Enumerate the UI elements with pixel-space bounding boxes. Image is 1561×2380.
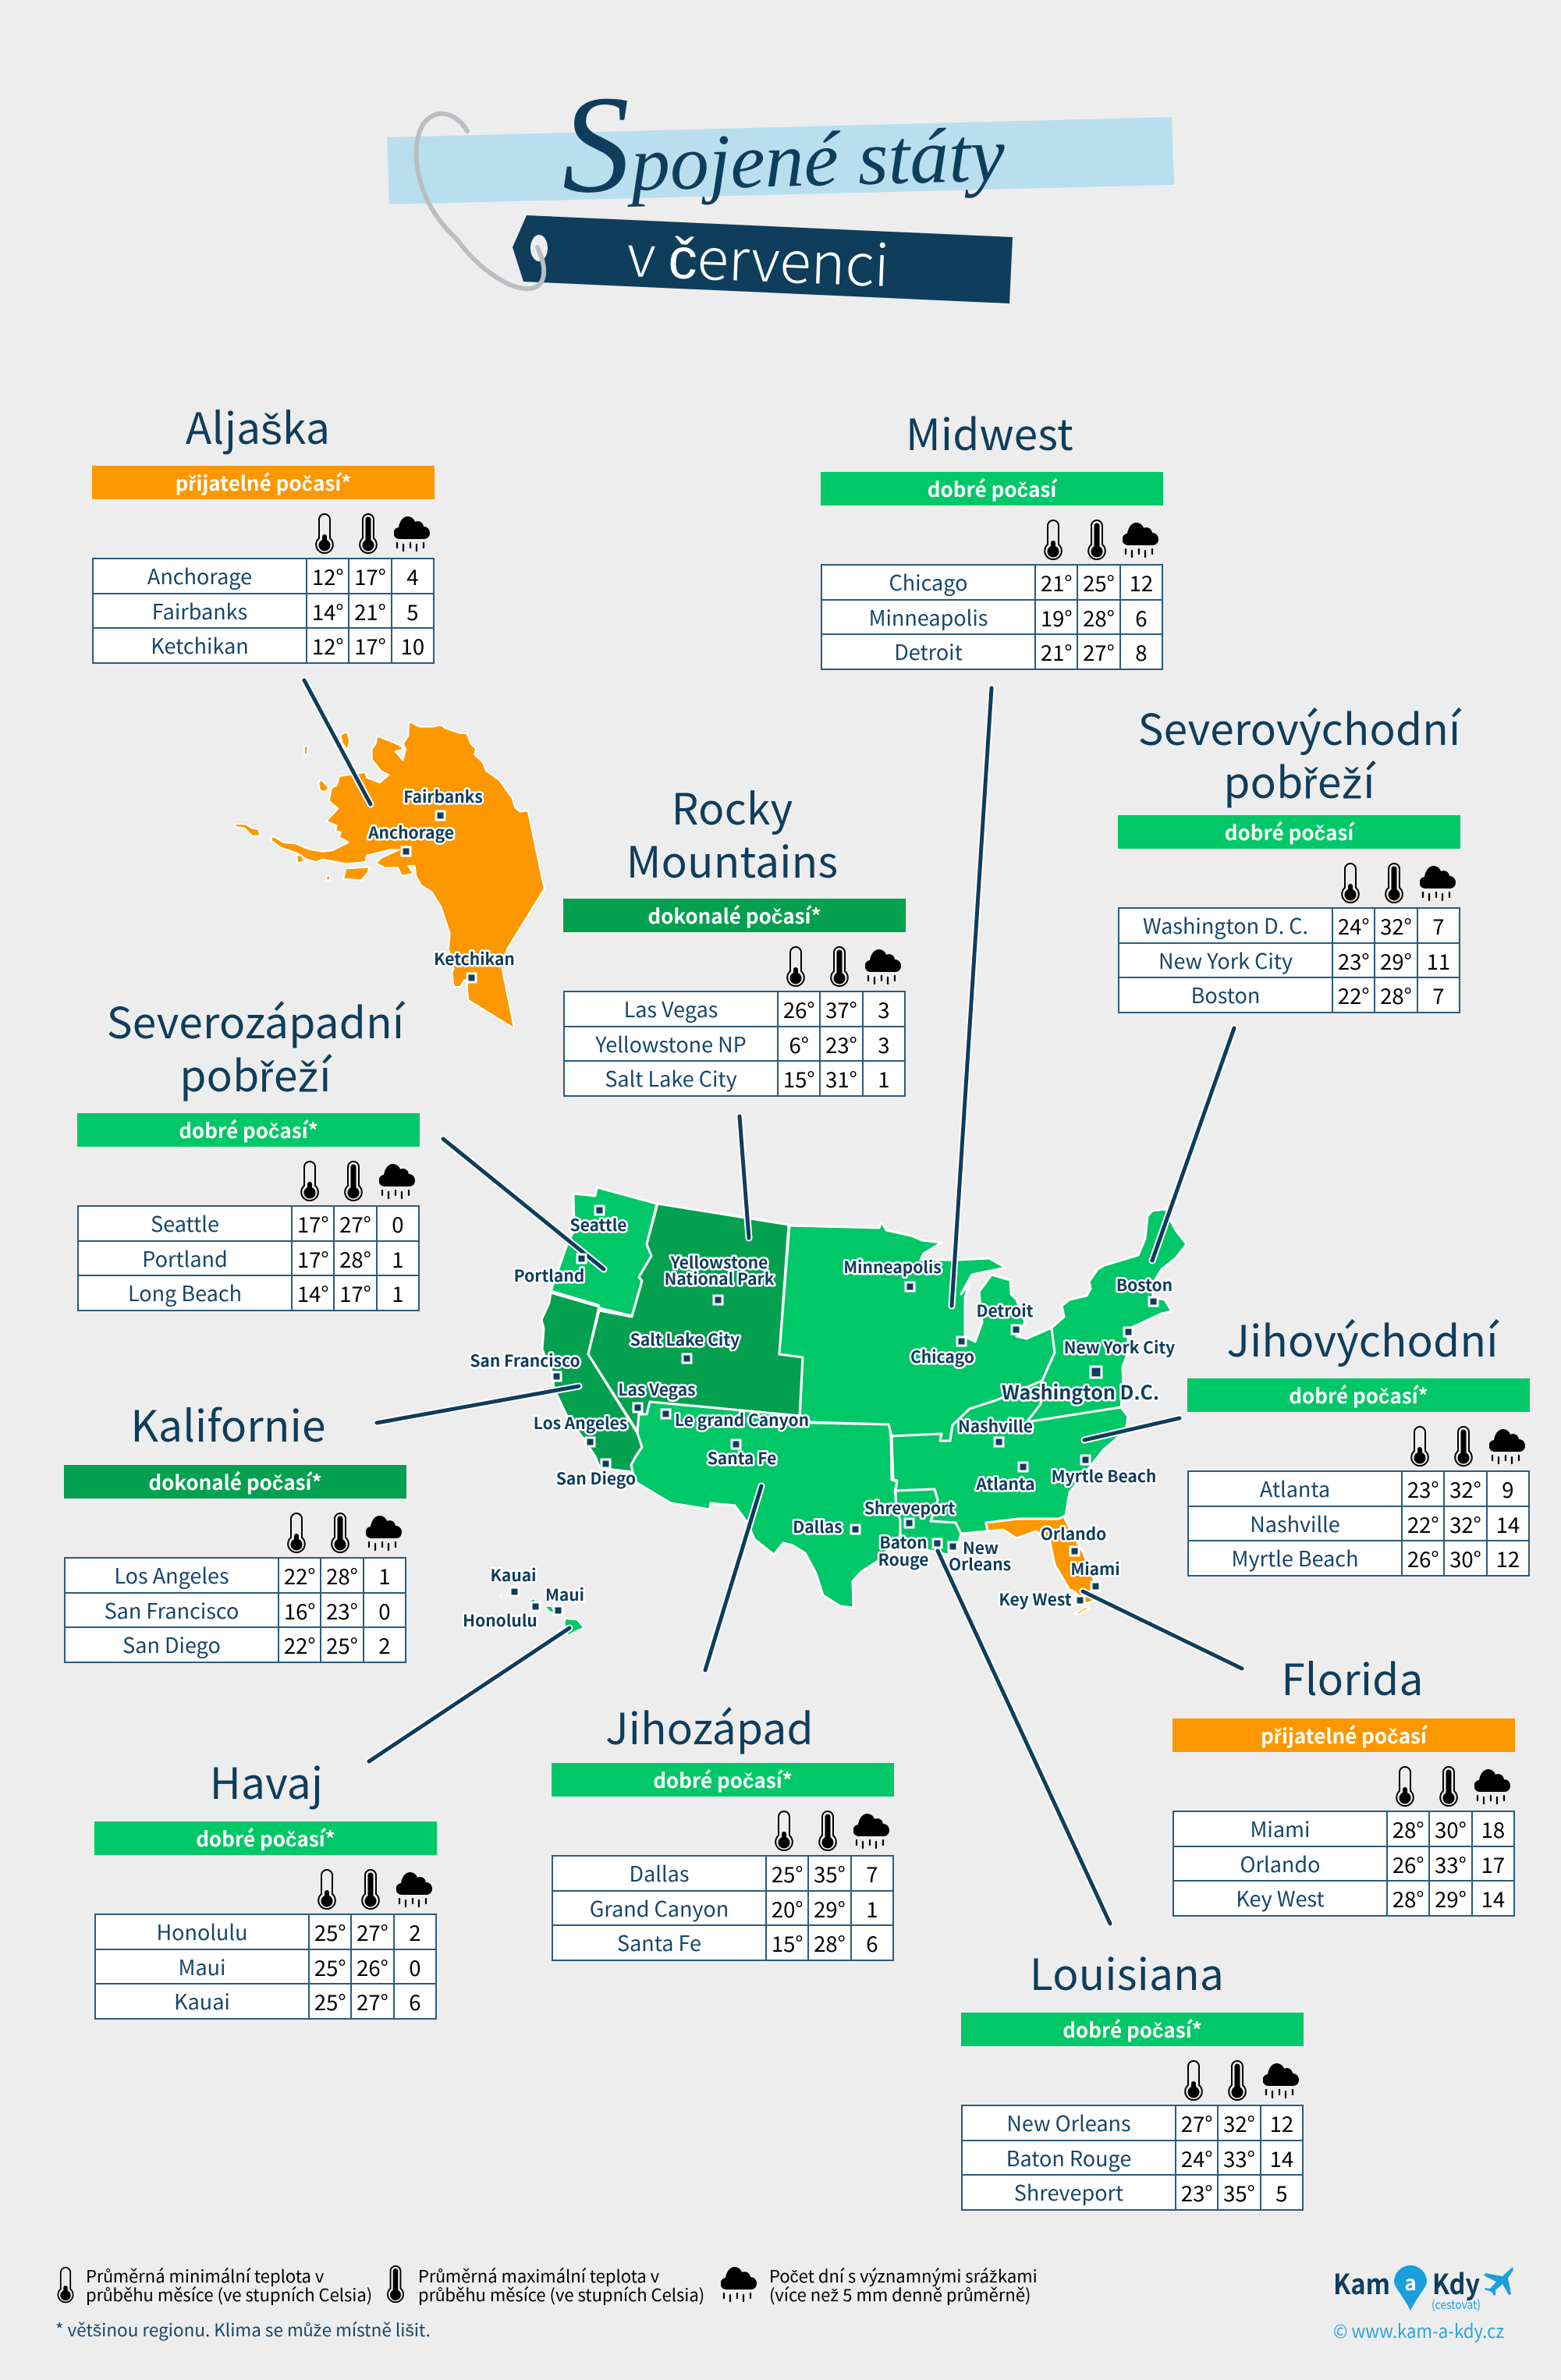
panel: Havaj — [94, 1749, 437, 2020]
icons — [1341, 863, 1456, 903]
map: Northeast region — [1027, 1209, 1187, 1422]
logo: Kam a Kdy: Kam — [1333, 2262, 1390, 2303]
icons — [1410, 1426, 1525, 1467]
table — [552, 1855, 894, 1961]
city: New Orleans: New — [963, 1536, 999, 1559]
table: Yellowstone NP — [595, 1028, 747, 1059]
city: Orlando: Orlando — [1041, 1522, 1106, 1545]
rating — [64, 1465, 406, 1499]
table: 5 — [406, 595, 418, 626]
heading: Rocky — [672, 775, 793, 837]
table: 5 — [1275, 2176, 1287, 2208]
panel: Aljaška — [92, 394, 435, 664]
table: Chicago — [889, 566, 967, 597]
icons — [315, 513, 430, 554]
table: 25° — [772, 1857, 804, 1889]
table: 7 — [1432, 910, 1444, 941]
rating — [552, 1763, 894, 1797]
icons — [94, 1869, 437, 1913]
rating — [1118, 815, 1460, 849]
pointer: Midwest — [952, 688, 992, 1306]
city: Miami: Miami — [1070, 1557, 1120, 1580]
icons — [1396, 1766, 1510, 1807]
city: Santa Fe: Santa Fe — [708, 1446, 776, 1470]
rating — [961, 2013, 1304, 2046]
icons — [300, 1161, 415, 1201]
table: 26° — [783, 993, 815, 1024]
table: 22° — [284, 1629, 316, 1660]
city: Orlando — [1041, 1522, 1106, 1555]
table: 1 — [878, 1062, 889, 1094]
pointer: California — [377, 1386, 579, 1423]
pointer: Southwest — [705, 1486, 761, 1670]
panel: Midwest — [821, 400, 1163, 670]
table: 27° — [339, 1208, 371, 1239]
table: Miami — [1250, 1813, 1310, 1843]
city: Detroit — [976, 1299, 1034, 1334]
legend text: maximum temperature: průběhu měsíce (ve stupních Celsia) — [418, 2282, 704, 2307]
table: 1 — [866, 1892, 878, 1924]
table: 35° — [814, 1857, 846, 1889]
rating: dobré počasí — [1225, 818, 1353, 846]
table: 21° — [1041, 636, 1073, 667]
table: Nashville — [1250, 1508, 1340, 1538]
table: Atlanta — [1260, 1473, 1330, 1503]
table: 26° — [1407, 1542, 1439, 1573]
table: New Orleans — [1006, 2107, 1131, 2137]
city: Los Angeles — [534, 1411, 627, 1446]
table: 10 — [401, 630, 424, 661]
table: 12 — [1130, 566, 1153, 598]
map: Northwest coast region — [551, 1187, 657, 1316]
heading — [107, 988, 406, 1104]
icons — [287, 1513, 402, 1553]
table: Shreveport — [1014, 2176, 1123, 2207]
heading: Jihovýchodní — [1226, 1307, 1499, 1369]
table: 21° — [1041, 566, 1073, 598]
table: Fairbanks — [152, 595, 247, 626]
legend icon: rain days — [721, 2267, 757, 2303]
city: Honolulu: Honolulu — [463, 1609, 537, 1632]
map: Alaska — [236, 722, 545, 1028]
table: 29° — [1435, 1882, 1467, 1914]
table: 12° — [312, 630, 344, 661]
rating: dokonalé počasí* — [148, 1467, 322, 1496]
table: 3 — [878, 1028, 889, 1059]
city: New Orleans: Orleans — [949, 1552, 1011, 1576]
table: Maui — [179, 1951, 225, 1981]
table: 12 — [1270, 2107, 1293, 2138]
city: Fairbanks: Fairbanks — [403, 785, 483, 808]
logo: Kam a Kdy: © www.kam-a-kdy.cz — [1333, 2316, 1504, 2343]
city: Ketchikan — [434, 947, 515, 982]
table: Ketchikan — [151, 630, 249, 660]
table: Grand Canyon — [590, 1892, 729, 1923]
legend text: rain days — [769, 2266, 1038, 2304]
table: 27° — [1181, 2107, 1213, 2138]
map: Hawaii islands — [498, 1593, 584, 1636]
table: 24° — [1181, 2142, 1213, 2173]
table: 35° — [1223, 2176, 1255, 2208]
table: 32° — [1449, 1508, 1481, 1539]
table: 18 — [1481, 1813, 1505, 1844]
table: 24° — [1338, 910, 1370, 941]
city: Miami — [1070, 1557, 1120, 1591]
city: Yellowstone National Park: National Park — [665, 1267, 775, 1290]
heading: Jihozápad — [605, 1694, 814, 1757]
table — [821, 564, 1163, 669]
table: 4 — [406, 560, 418, 591]
table: 1 — [392, 1277, 403, 1308]
table: 17° — [297, 1208, 329, 1239]
table: 23° — [825, 1028, 857, 1059]
table: 28° — [1380, 979, 1412, 1010]
logo: Kam a Kdy — [1326, 2262, 1521, 2348]
panel: Kalifornie — [64, 1392, 406, 1663]
table: 17 — [1481, 1848, 1505, 1879]
table: 31° — [825, 1062, 857, 1094]
table: Portland — [142, 1243, 228, 1273]
city: Key West: Key West — [999, 1587, 1072, 1611]
pointer: Rocky Mountains — [740, 1116, 749, 1238]
table: Myrtle Beach — [1232, 1542, 1358, 1573]
table: 16° — [284, 1594, 316, 1626]
legend text: minimum temperature: průběhu měsíce (ve stupních Celsia) — [86, 2282, 372, 2307]
heading: pobřeží — [1223, 748, 1375, 810]
table: 17° — [354, 630, 386, 661]
table: 32° — [1223, 2107, 1255, 2138]
table: 22° — [284, 1559, 316, 1591]
heading: Midwest — [906, 400, 1073, 463]
table: 27° — [357, 1916, 388, 1947]
table — [77, 1205, 420, 1311]
city: Los Angeles: Los Angeles — [534, 1411, 627, 1435]
icons — [1044, 520, 1158, 560]
heading: pobřeží — [179, 1041, 332, 1104]
pointer: Hawaii — [369, 1628, 569, 1761]
pointer: Florida — [1083, 1591, 1242, 1669]
table: 11 — [1427, 945, 1450, 976]
table: 1 — [378, 1559, 390, 1591]
table: 0 — [392, 1208, 403, 1239]
subtitle: v červenci: v červenci — [626, 210, 891, 303]
heading: Severozápadní — [107, 988, 404, 1051]
legend text: maximum temperature: Průměrná maximální teplota v — [418, 2263, 659, 2288]
legend icon: minimum temperature — [56, 2267, 75, 2304]
table: 23° — [1407, 1473, 1439, 1504]
table: Minneapolis — [869, 601, 988, 632]
heading: Mountains — [626, 828, 838, 890]
logo: Kam a Kdy: (cestovat) — [1432, 2294, 1481, 2313]
table: 19° — [1041, 601, 1073, 633]
rating: přijatelné počasí* — [176, 468, 351, 497]
city: Minneapolis — [843, 1255, 942, 1291]
table: Detroit — [894, 636, 963, 666]
city: Yellowstone National Park: Yellowstone — [670, 1250, 768, 1274]
heading: Severovýchodní — [1138, 695, 1460, 757]
table: 17° — [339, 1277, 371, 1308]
table: Boston — [1191, 979, 1260, 1009]
table: 27° — [357, 1985, 388, 2016]
title ribbon: light blue — [387, 117, 1174, 204]
rating: dobré počasí* — [196, 1824, 335, 1853]
panel: Jihovýchodní — [1187, 1307, 1530, 1577]
table: 28° — [326, 1559, 358, 1591]
table: Salt Lake City — [605, 1062, 737, 1093]
table: 26° — [357, 1951, 388, 1982]
panel: Severovýchodní pobřeží — [1118, 695, 1462, 1013]
table: 30° — [1435, 1813, 1467, 1844]
city: Anchorage: Anchorage — [367, 821, 454, 844]
city: Chicago: Chicago — [910, 1345, 974, 1368]
map: California region — [541, 1293, 642, 1472]
table: Anchorage — [147, 560, 252, 591]
table: 25° — [326, 1629, 358, 1660]
table: 6° — [789, 1028, 809, 1059]
city: San Diego: San Diego — [556, 1467, 636, 1490]
city: Yellowstone National Park — [665, 1250, 775, 1304]
table: 14° — [312, 595, 344, 626]
table: 23° — [1338, 945, 1370, 976]
table: Kauai — [174, 1985, 230, 2016]
title: Spojené státy: Spojené státy — [559, 56, 1006, 222]
rating — [94, 1821, 437, 1855]
city: Dallas: Dallas — [793, 1515, 843, 1538]
legend text: maximum temperature — [418, 2266, 704, 2304]
table: New York City — [1158, 945, 1293, 975]
table — [64, 1557, 406, 1663]
table: 20° — [772, 1892, 804, 1924]
city: New Orleans — [949, 1536, 1011, 1576]
map: Florida region — [986, 1516, 1094, 1615]
panel: Florida — [1173, 1645, 1515, 1917]
table: 27° — [1083, 636, 1115, 667]
icons — [775, 1811, 889, 1851]
table: 29° — [814, 1892, 846, 1924]
table: 23° — [326, 1594, 358, 1626]
table: 7 — [1432, 979, 1444, 1010]
table: 29° — [1380, 945, 1412, 976]
heading — [1138, 695, 1462, 810]
table: Los Angeles — [114, 1559, 229, 1590]
logo: Kam a Kdy: a — [1404, 2268, 1417, 2297]
city: Washington D.C.: Washington D.C. — [1002, 1378, 1159, 1406]
table: 33° — [1435, 1848, 1467, 1879]
city: Myrtle Beach: Myrtle Beach — [1052, 1464, 1156, 1488]
legend text: minimum temperature: Průměrná minimální teplota v — [86, 2263, 324, 2288]
city: Shreveport: Shreveport — [864, 1496, 955, 1520]
city: Nashville: Nashville — [958, 1414, 1033, 1438]
city: Baton Rouge — [878, 1531, 942, 1571]
table: 14 — [1270, 2142, 1293, 2173]
city: Maui: Maui — [545, 1583, 584, 1606]
table: 32° — [1449, 1473, 1481, 1504]
legend text: rain days: (více než 5 mm denně průměrně) — [769, 2282, 1031, 2307]
rating — [563, 899, 906, 932]
table: 37° — [825, 993, 857, 1024]
rating — [821, 472, 1163, 505]
table: 21° — [354, 595, 386, 626]
footnote: * většinou regionu. Klima se může místně lišit. — [55, 2317, 431, 2342]
city: Baton Rouge: Rouge — [878, 1548, 928, 1571]
table: 25° — [1083, 566, 1115, 598]
rating — [1173, 1718, 1515, 1752]
table: 12 — [1496, 1542, 1520, 1573]
legend text: rain days: Počet dní s významnými srážkami — [769, 2263, 1038, 2288]
heading — [626, 775, 838, 890]
table: 12° — [312, 560, 344, 591]
table: 14 — [1481, 1882, 1505, 1914]
map: Rocky Mountains region — [588, 1204, 803, 1431]
table: Washington D. C. — [1143, 910, 1308, 940]
rating: dobré počasí* — [653, 1765, 793, 1794]
table: Orlando — [1240, 1848, 1320, 1878]
map: Southwest region — [631, 1402, 900, 1608]
table: 15° — [772, 1927, 804, 1958]
table: 6 — [409, 1985, 420, 2016]
table: 6 — [866, 1927, 878, 1958]
gray tag string — [417, 114, 544, 289]
table: Long Beach — [128, 1277, 242, 1307]
rating: dobré počasí* — [1063, 2015, 1202, 2044]
legend text: minimum temperature — [86, 2266, 372, 2304]
rating: dobré počasí* — [179, 1116, 318, 1144]
panel: Rocky Mountains — [563, 775, 906, 1097]
heading: Florida — [1281, 1645, 1424, 1708]
table — [1118, 907, 1460, 1013]
city: Ketchikan: Ketchikan — [434, 947, 515, 970]
pointer: Northeast — [1152, 1028, 1234, 1261]
logo: Kam a Kdy: Kdy — [1432, 2262, 1480, 2303]
rating — [92, 466, 435, 499]
city: Detroit: Detroit — [976, 1299, 1034, 1322]
panel: Severozápadní pobřeží — [77, 988, 420, 1311]
table: 6 — [1135, 601, 1147, 633]
city: Le grand Canyon: Le grand Canyon — [675, 1408, 809, 1431]
table: 17° — [354, 560, 386, 591]
map: Southeast region — [892, 1381, 1128, 1534]
pointer: Louisiana — [938, 1551, 1110, 1924]
city: Baton Rouge: Baton — [879, 1531, 928, 1554]
table: 14 — [1496, 1508, 1520, 1539]
table: 28° — [339, 1243, 371, 1274]
rating — [1187, 1378, 1530, 1412]
tag hole — [530, 235, 548, 261]
map: Midwest region — [779, 1222, 1055, 1441]
table: 28° — [814, 1927, 846, 1958]
table — [563, 991, 906, 1097]
table: 9 — [1502, 1473, 1513, 1504]
city: Seattle: Seattle — [569, 1213, 627, 1236]
table: Dallas — [630, 1857, 689, 1888]
panel: Louisiana — [961, 1950, 1304, 2211]
city: Boston: Boston — [1116, 1273, 1173, 1296]
table — [94, 1914, 437, 2019]
city: Las Vegas — [618, 1378, 696, 1412]
city: Salt Lake City: Salt Lake City — [630, 1328, 740, 1351]
table: 26° — [1392, 1848, 1424, 1879]
heading: Louisiana — [1030, 1940, 1224, 2002]
table: 0 — [409, 1951, 420, 1982]
title tag: navy — [513, 215, 1013, 303]
table: 8 — [1135, 636, 1147, 667]
table: 2 — [409, 1916, 420, 1947]
legend icon: maximum temperature — [386, 2265, 405, 2304]
heading: Havaj — [210, 1749, 323, 1811]
rating — [77, 1113, 420, 1147]
table: 22° — [1407, 1508, 1439, 1539]
table — [961, 2105, 1304, 2211]
table: 7 — [866, 1857, 878, 1889]
table — [1187, 1470, 1530, 1576]
table: Las Vegas — [624, 993, 718, 1023]
table: Santa Fe — [617, 1927, 701, 1957]
table: Key West — [1236, 1882, 1325, 1913]
city: Minneapolis: Minneapolis — [843, 1255, 942, 1279]
pointer: Northwest — [443, 1139, 604, 1269]
city: San Francisco: San Francisco — [470, 1349, 580, 1372]
heading: Kalifornie — [130, 1392, 326, 1454]
table: 3 — [878, 993, 889, 1024]
rating: přijatelné počasí — [1261, 1721, 1427, 1750]
table: 0 — [378, 1594, 390, 1626]
city: Fairbanks — [403, 785, 483, 820]
table: San Diego — [122, 1629, 221, 1659]
table — [92, 558, 435, 663]
icons — [786, 946, 901, 987]
city: Salt Lake City — [630, 1328, 740, 1363]
table: 14° — [297, 1277, 329, 1308]
rating: dobré počasí* — [1289, 1381, 1428, 1410]
city: New York City: New York City — [1064, 1335, 1175, 1359]
table: 22° — [1338, 979, 1370, 1010]
table: 1 — [392, 1243, 403, 1274]
table: 2 — [378, 1629, 390, 1660]
table — [1173, 1811, 1515, 1916]
table: San Francisco — [105, 1594, 239, 1625]
city: Las Vegas: Las Vegas — [618, 1378, 696, 1401]
table: 25° — [314, 1985, 346, 2016]
table: 28° — [1392, 1882, 1424, 1914]
table: Baton Rouge — [1006, 2142, 1131, 2173]
city: Kauai: Kauai — [490, 1563, 537, 1587]
city: Atlanta: Atlanta — [975, 1472, 1035, 1495]
rating: dokonalé počasí* — [647, 901, 821, 930]
table: 33° — [1223, 2142, 1255, 2173]
rating: dobré počasí — [928, 474, 1056, 503]
table: 25° — [314, 1916, 346, 1947]
table: 15° — [783, 1062, 815, 1094]
table: 28° — [1083, 601, 1115, 633]
icons — [961, 2060, 1304, 2104]
table: 17° — [297, 1243, 329, 1274]
map: Louisiana region — [896, 1489, 961, 1555]
city: Anchorage — [367, 821, 454, 856]
panel: Jihozápad — [552, 1694, 894, 1961]
city: Portland: Portland — [514, 1264, 584, 1287]
table: Seattle — [151, 1208, 219, 1238]
table: 25° — [314, 1951, 346, 1982]
pointer: Southeast — [1084, 1418, 1180, 1440]
table: 30° — [1449, 1542, 1481, 1573]
table: 23° — [1181, 2176, 1213, 2208]
table: Honolulu — [157, 1916, 247, 1946]
heading: Aljaška — [186, 394, 330, 456]
table: 32° — [1380, 910, 1412, 941]
table: 28° — [1392, 1813, 1424, 1844]
pointer: Alaska — [304, 680, 371, 804]
